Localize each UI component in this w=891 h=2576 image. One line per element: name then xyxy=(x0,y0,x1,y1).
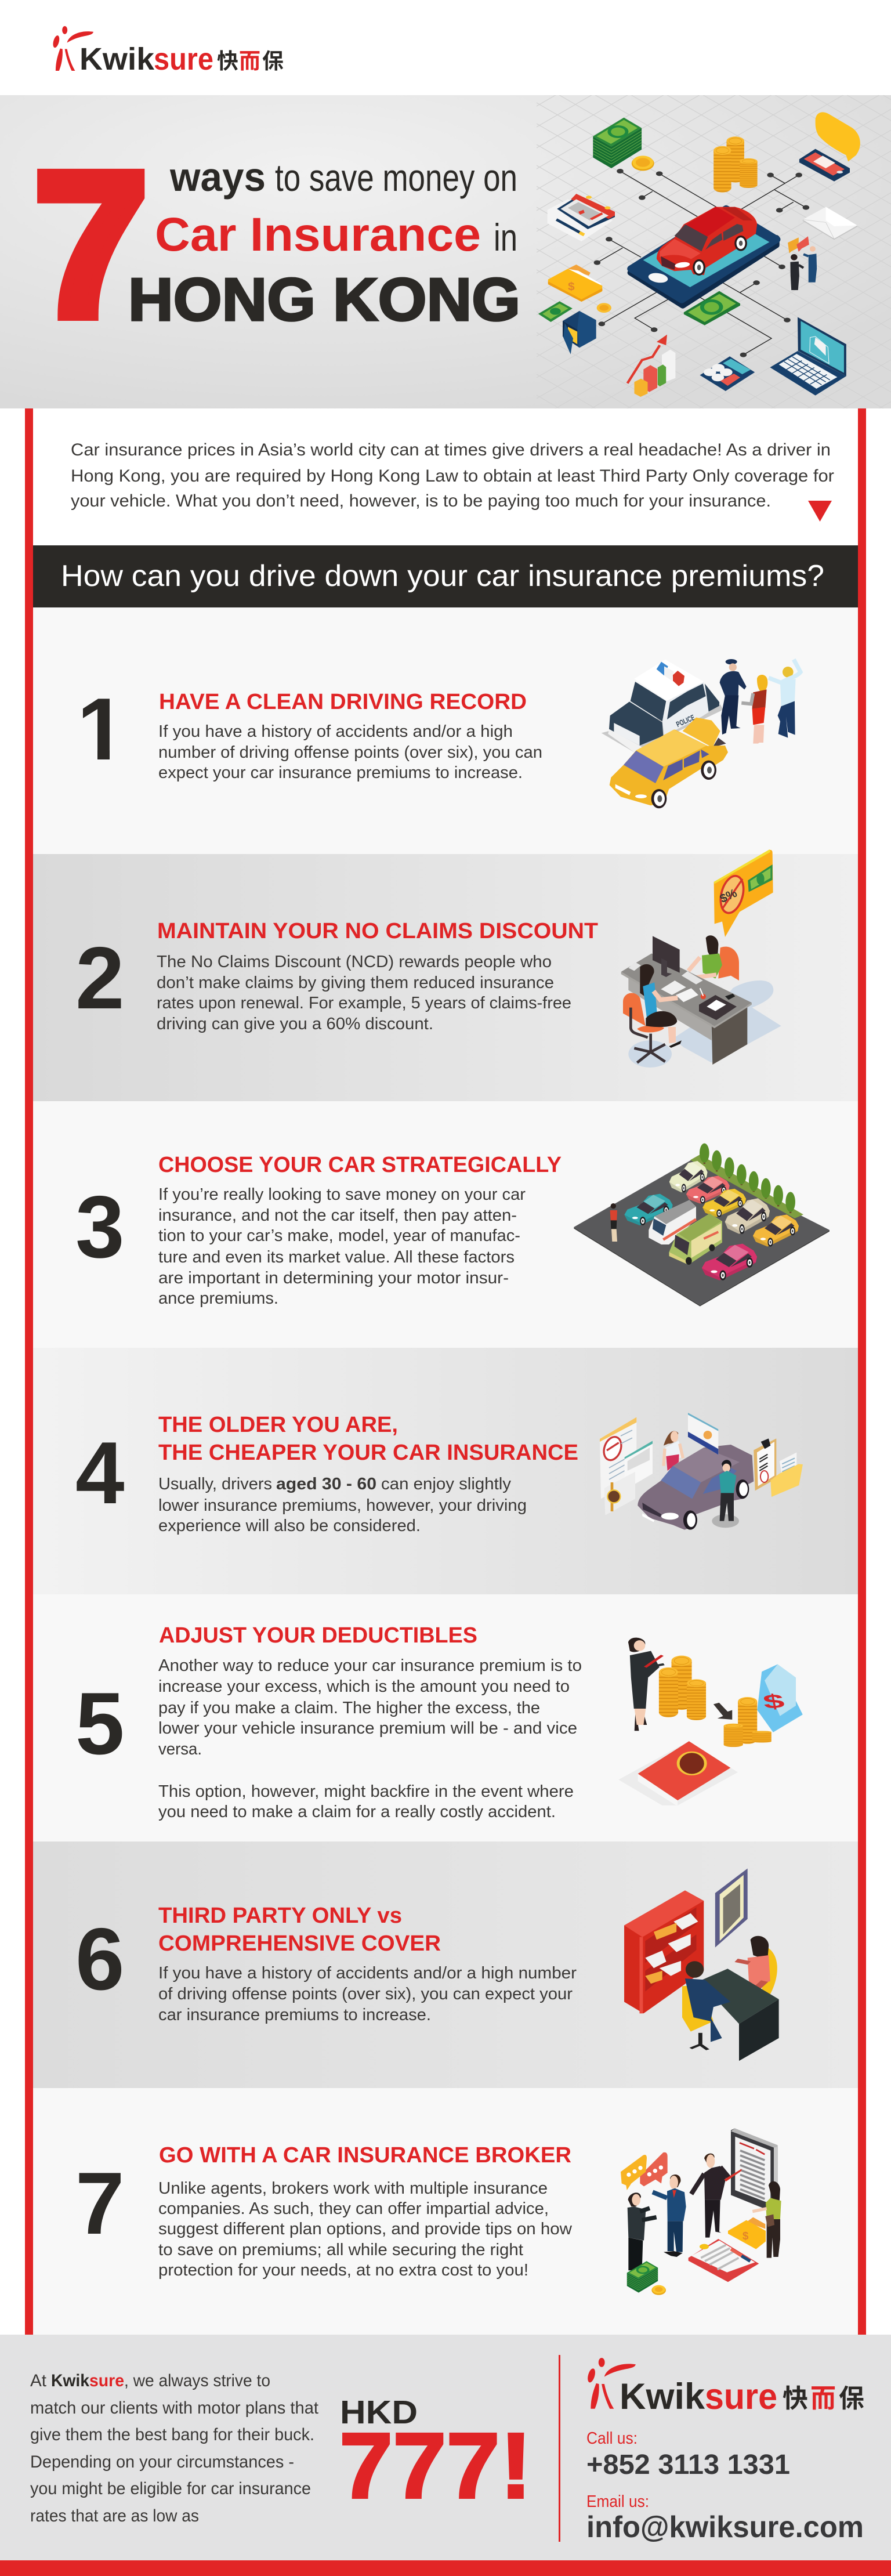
tip 6 heading: THIRD PARTY ONLY vs xyxy=(158,1904,402,1928)
ID card xyxy=(688,1413,718,1455)
clipboard xyxy=(689,2239,759,2282)
tip 5 body: pay if you make a claim. The higher the excess, the xyxy=(158,1699,540,1717)
icon: folder with dollar: $ xyxy=(568,281,575,293)
blue document with dollar: $ xyxy=(761,1690,786,1713)
footer logo: 快 xyxy=(783,2378,808,2415)
folder: $ xyxy=(742,2230,749,2242)
paperwork left xyxy=(600,1417,653,1515)
grey car xyxy=(638,1445,754,1530)
tip 2 body: rates upon renewal. For example, 5 years of claims-free xyxy=(157,994,571,1012)
title: to save money on xyxy=(275,156,517,199)
tip 2 body xyxy=(157,953,571,1033)
tip 4 body: aged 30 - 60 xyxy=(276,1475,376,1493)
panel: tip 3 xyxy=(33,1101,858,1348)
computer monitor and keyboard xyxy=(628,936,703,985)
tip 5 heading: ADJUST YOUR DEDUCTIBLES xyxy=(159,1623,477,1648)
blue document with dollar xyxy=(757,1664,803,1732)
panel: tip 7 xyxy=(33,2088,858,2335)
man with raised arms xyxy=(769,660,801,738)
footer message xyxy=(30,2371,319,2526)
number 4: 4 xyxy=(75,1424,125,1522)
ground xyxy=(574,1155,830,1307)
documents and printer xyxy=(661,981,737,1020)
bookcase xyxy=(624,1890,704,2013)
title: ways xyxy=(169,154,266,200)
title xyxy=(128,154,520,334)
tip 3 heading: CHOOSE YOUR CAR STRATEGICALLY xyxy=(158,1153,562,1177)
tip 7 body: companies. As such, they can offer impartial advice, xyxy=(158,2199,549,2218)
logo wordmark: sure xyxy=(154,42,213,77)
icon: speech bubble xyxy=(816,112,860,161)
illustration: parking lot xyxy=(574,1144,830,1307)
icon: growth chart xyxy=(628,335,675,397)
panel: tip 6 xyxy=(33,1841,858,2088)
number 6: 6 xyxy=(75,1910,125,2009)
tip 5 body: increase your excess, which is the amount you need to xyxy=(158,1677,570,1696)
divider xyxy=(559,2355,560,2542)
footer logo: Kwik xyxy=(620,2376,705,2417)
tip 4 body: lower insurance premiums, however, your driving xyxy=(158,1496,527,1515)
presentation board xyxy=(731,2128,778,2209)
businesswoman xyxy=(628,1638,664,1731)
contact details xyxy=(586,2429,864,2544)
illustration: deductibles xyxy=(618,1638,803,1806)
customer in orange chair xyxy=(623,964,682,1063)
footer message: At xyxy=(30,2371,47,2390)
circuit lines xyxy=(594,169,809,357)
icon: two businessmen talking xyxy=(788,236,817,290)
tip 7 body: protection for your needs, at no extra cost to you! xyxy=(158,2261,528,2280)
icon: banknote small xyxy=(538,301,573,322)
number 1: 1 xyxy=(77,680,126,779)
icon: coin xyxy=(632,155,654,171)
number 5: 5 xyxy=(75,1674,125,1773)
contact details: Email us: xyxy=(586,2492,649,2511)
tip 7 body xyxy=(158,2179,573,2280)
tip 6 heading xyxy=(158,1904,441,1956)
footer message: you might be eligible for car insurance xyxy=(30,2479,311,2498)
icon: coin small xyxy=(597,303,611,313)
man xyxy=(712,1460,739,1528)
tip 3 body: ture and even its market value. All these factors xyxy=(158,1248,515,1267)
tip 4 body: Usually, drivers xyxy=(158,1475,272,1493)
tip 3 body: ance premiums. xyxy=(158,1289,278,1308)
tip 4 body xyxy=(158,1475,527,1535)
pedestrian xyxy=(610,1203,617,1242)
logo wordmark: 保 xyxy=(262,44,284,75)
big number seven: 7 xyxy=(34,130,148,359)
panel: hero banner xyxy=(0,95,891,408)
framed document xyxy=(715,1868,748,1948)
bottom red strip xyxy=(0,2560,891,2576)
panel: tip 4 xyxy=(33,1348,858,1594)
tip 7 body: to save on premiums; all while securing the right xyxy=(158,2241,523,2259)
ambulance xyxy=(649,1200,696,1244)
tip 2 body: don’t make claims by giving them reduced insurance xyxy=(157,974,554,992)
icon: safe xyxy=(563,311,596,354)
tip 7 body: Unlike agents, brokers work with multiple insurance xyxy=(158,2179,548,2198)
pink car xyxy=(702,1244,757,1280)
header logo xyxy=(52,26,284,77)
panel: tip 1 xyxy=(82,658,803,809)
title: in xyxy=(494,216,517,259)
icon: laptop xyxy=(770,317,846,396)
intro text xyxy=(71,440,834,511)
icon: calendar and pen xyxy=(548,194,615,241)
tip 4 heading xyxy=(158,1413,578,1465)
tip 1 body: expect your car insurance premiums to increase. xyxy=(158,764,523,782)
logo wordmark xyxy=(79,42,284,77)
footer message: sure xyxy=(89,2371,124,2390)
police car: POLICE xyxy=(675,713,696,729)
speech bubble with crossed dollar: $% xyxy=(718,887,739,906)
footer message: give them the best bang for their buck. xyxy=(30,2425,314,2444)
woman at desk xyxy=(736,1936,777,1994)
tip 2 heading: MAINTAIN YOUR NO CLAIMS DISCOUNT xyxy=(157,919,598,943)
tip 1 body xyxy=(158,722,542,782)
heading band xyxy=(33,545,858,607)
coin xyxy=(651,2285,666,2295)
tip 1 body: number of driving offense points (over six), you can xyxy=(158,743,542,762)
yellow car xyxy=(610,718,728,808)
tip 2 body: driving can give you a 60% discount. xyxy=(157,1015,433,1033)
icon: red car xyxy=(657,207,757,276)
footer logo: 而 xyxy=(810,2378,836,2415)
intro text: Car insurance prices in Asia’s world city can at times give drivers a real headache! As a driver in xyxy=(71,440,831,460)
tip 5 body: versa. xyxy=(158,1740,202,1759)
tip 5 body xyxy=(158,1656,582,1821)
title: HONG KONG xyxy=(128,266,520,334)
tip 5 body: Another way to reduce your car insurance premium is to xyxy=(158,1656,582,1675)
contact details: Call us: xyxy=(586,2429,638,2448)
footer logo xyxy=(586,2358,864,2417)
logo wordmark: 而 xyxy=(239,44,260,75)
icon: envelope xyxy=(803,207,857,239)
tip 6 body: car insurance premiums to increase. xyxy=(158,2006,431,2024)
tree row xyxy=(700,1144,795,1213)
woman with bag xyxy=(752,2181,781,2258)
illustration: broker meeting xyxy=(621,2128,781,2295)
tip 5 body: lower your vehicle insurance premium will be - and vice xyxy=(158,1719,577,1738)
tip 6 body xyxy=(158,1964,577,2024)
parked cars xyxy=(624,1161,799,1247)
number 3: 3 xyxy=(75,1178,125,1276)
panel: tip 2 xyxy=(33,849,858,1101)
tip 2 body: The No Claims Discount (NCD) rewards people who xyxy=(157,953,552,971)
icon: cash stack xyxy=(593,118,642,168)
man presenting xyxy=(691,2154,741,2238)
footer logo: sure xyxy=(705,2376,777,2417)
tip 5 body: you need to make a claim for a really costly accident. xyxy=(158,1803,556,1821)
tip 6 body: of driving offense points (over six), you can expect your xyxy=(158,1985,573,2003)
tip 1 body: If you have a history of accidents and/or a high xyxy=(158,722,513,741)
clipboard and folder xyxy=(754,1438,803,1497)
intro text: Hong Kong, you are required by Hong Kong Law to obtain at least Third Party Only coverage for xyxy=(71,466,834,486)
icon: mobile phone xyxy=(799,149,850,182)
icon: Kwiksure mark xyxy=(52,26,93,71)
folder xyxy=(728,2217,766,2249)
desk xyxy=(621,953,752,1065)
tip 1 heading: HAVE A CLEAN DRIVING RECORD xyxy=(159,690,527,714)
intro text: your vehicle. What you don’t need, however, is to be paying too much for your insurance. xyxy=(71,491,771,511)
desk xyxy=(699,1969,779,2061)
price callout: 777! xyxy=(339,2414,532,2517)
tip 6 heading: COMPREHENSIVE COVER xyxy=(158,1931,441,1956)
number 7: 7 xyxy=(75,2154,125,2253)
contact details: info@kwiksure.com xyxy=(586,2510,864,2544)
illustration: police and yellow car xyxy=(602,659,801,808)
tip 7 heading: GO WITH A CAR INSURANCE BROKER xyxy=(159,2143,571,2168)
icon: banknote large xyxy=(684,291,740,325)
speech bubbles xyxy=(621,2152,668,2190)
woman xyxy=(741,675,767,744)
footer message: match our clients with motor plans that xyxy=(30,2398,319,2418)
speech bubble with crossed dollar xyxy=(714,849,773,937)
footer message: , we always strive to xyxy=(124,2371,270,2390)
tip 3 body: insurance, and not the car itself, then pay atten- xyxy=(158,1206,517,1225)
tip 3 body xyxy=(158,1185,526,1308)
icon: smartphone platform xyxy=(631,209,777,306)
floor shadow xyxy=(628,981,781,1068)
panel: intro xyxy=(71,440,834,522)
icon: calculator xyxy=(700,356,755,391)
arrow xyxy=(713,1703,732,1720)
coin stacks small xyxy=(724,1697,772,1747)
footer message: Depending on your circumstances - xyxy=(30,2452,294,2472)
tip 6 body: If you have a history of accidents and/or a high number xyxy=(158,1964,577,1982)
woman xyxy=(664,1431,683,1471)
footer message: rates that are as low as xyxy=(30,2506,199,2526)
arrow: down triangle xyxy=(808,501,832,522)
illustration: insurance office xyxy=(624,1868,779,2061)
contact details: +852 3113 1331 xyxy=(586,2450,790,2480)
tip 3 body: are important in determining your motor insur- xyxy=(158,1269,509,1287)
title: Car Insurance xyxy=(155,208,481,261)
rear chair and clerk xyxy=(689,935,739,981)
tip 4 body: experience will also be considered. xyxy=(158,1517,421,1535)
logo wordmark: Kwik xyxy=(79,42,155,77)
delivery van xyxy=(669,1214,722,1265)
illustration: car and paperwork xyxy=(600,1413,803,1530)
logo wordmark: 快 xyxy=(217,44,238,75)
icon: coin stacks xyxy=(713,136,758,193)
footer logo: 保 xyxy=(839,2378,864,2415)
police car xyxy=(602,660,723,752)
hero illustration: connected car insurance xyxy=(538,112,860,397)
police officer xyxy=(720,659,747,735)
panel: tip 5 xyxy=(33,1594,858,1841)
tip 4 body: can enjoy slightly xyxy=(381,1475,512,1493)
cash stack xyxy=(627,2261,658,2293)
tip 5 body: This option, however, might backfire in the event where xyxy=(158,1782,574,1801)
tip 7 body: suggest different plan options, and provide tips on how xyxy=(158,2220,573,2238)
red premium book xyxy=(618,1741,738,1806)
panel: footer xyxy=(0,2335,891,2560)
icon: folder with dollar xyxy=(548,265,602,302)
coin stacks large xyxy=(659,1656,706,1720)
footer message: Kwik xyxy=(51,2371,89,2390)
price callout: HKD xyxy=(340,2394,418,2431)
heading band: How can you drive down your car insurance premiums? xyxy=(61,559,824,593)
tip 3 body: If you’re really looking to save money on your car xyxy=(158,1185,526,1204)
illustration: office desk xyxy=(621,849,781,1068)
man center in blue suit xyxy=(653,2175,686,2257)
number 2: 2 xyxy=(75,929,125,1027)
man left xyxy=(628,2193,657,2270)
tip 4 heading: THE CHEAPER YOUR CAR INSURANCE xyxy=(158,1441,578,1465)
red side bars xyxy=(25,408,866,2335)
man in yellow chair xyxy=(682,1961,730,2050)
tip 4 heading: THE OLDER YOU ARE, xyxy=(158,1413,398,1437)
tip 3 body: tion to your car’s make, model, year of manufac- xyxy=(158,1227,520,1245)
